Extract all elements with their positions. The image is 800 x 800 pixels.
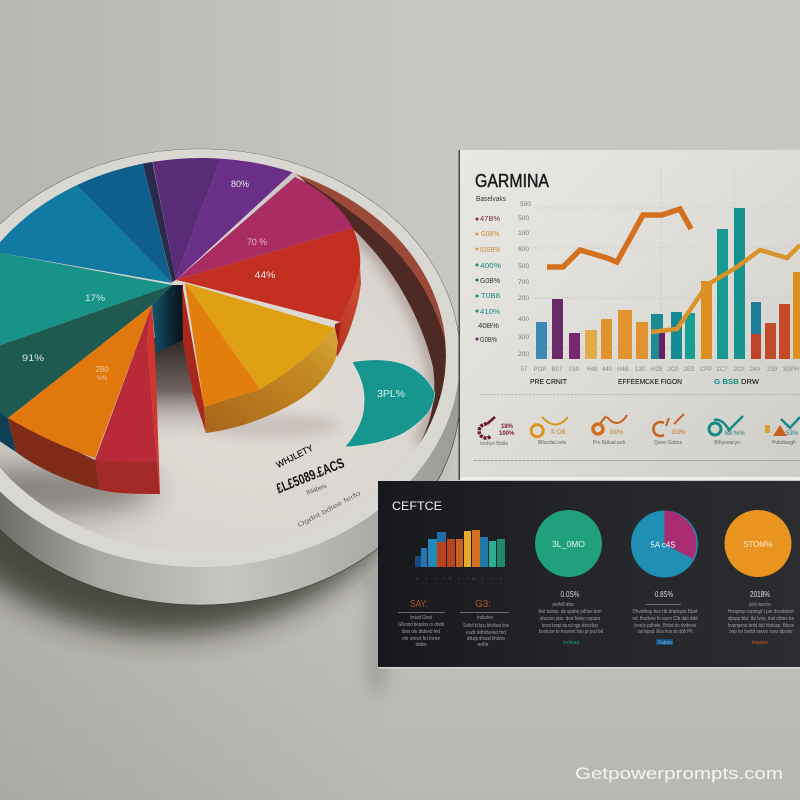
heading: GARMINA bbox=[475, 171, 549, 191]
stat column 2: G3: bbox=[475, 599, 491, 610]
slice: teal crescent bbox=[345, 360, 435, 447]
stat column 5: Inwaco bbox=[752, 640, 768, 646]
icon: metric 1: Inshyo flotila bbox=[480, 441, 508, 447]
slice: purple dark bbox=[152, 155, 222, 280]
circle: orange bbox=[724, 510, 792, 577]
dividers bbox=[480, 394, 800, 396]
icon: metric 3: Pro Bdiual.aoh bbox=[593, 440, 626, 446]
line: lower orange trend bbox=[651, 245, 800, 332]
x axis labels: 2C7 bbox=[716, 367, 728, 373]
text block: disc caption: WHJLETY bbox=[275, 443, 315, 470]
stat column 1: Invisid Glosd bbox=[410, 615, 432, 621]
x axis labels: 3GPH bbox=[783, 367, 799, 373]
icon: metric 5: B8 %% bbox=[725, 431, 745, 437]
x axis labels: B07 bbox=[552, 367, 563, 373]
slice: crimson side bbox=[147, 305, 160, 494]
x axis labels bbox=[521, 367, 799, 373]
stat column 5: bvp ho bnsbt ovvvo svvs dpvstv bbox=[730, 629, 793, 635]
disc floor bbox=[0, 158, 446, 552]
slice: left low wall bbox=[0, 408, 16, 452]
x axis labels: 039 bbox=[569, 367, 580, 373]
stat column 2 bbox=[460, 599, 509, 648]
slice: red wall bbox=[337, 267, 361, 357]
x axis labels: POP bbox=[534, 367, 546, 373]
section labels bbox=[530, 379, 759, 386]
stat column 5 bbox=[728, 590, 794, 646]
icon: metric 6: 53% bbox=[786, 431, 799, 437]
divider strip bbox=[142, 160, 176, 282]
stat column 2: Svthd ld bpu bhvfuse tine bbox=[463, 623, 509, 629]
subheading: Baselvaks bbox=[476, 196, 506, 203]
legend: G0B% bbox=[480, 337, 497, 344]
y axis labels: 600 bbox=[518, 246, 529, 253]
y axis labels: 500 bbox=[518, 215, 529, 222]
stat column 5: bd ho bwsot hc bbox=[749, 602, 771, 608]
x axis labels: 440 bbox=[602, 367, 613, 373]
stat column 4: 0.8S% bbox=[655, 590, 673, 599]
floor shadows bbox=[0, 174, 446, 514]
slice: yellow bbox=[185, 283, 335, 389]
panel: chart sheet bbox=[458, 150, 800, 480]
y axis labels: 100 bbox=[518, 230, 529, 237]
icon: metric 2: Bfluxdal.ovts bbox=[538, 440, 567, 446]
pie percent labels: 17% bbox=[85, 293, 105, 303]
icon: metric 1: 100% bbox=[499, 431, 515, 437]
icon: metric 5 bbox=[709, 416, 745, 446]
circle: green: 3L_0MO bbox=[552, 540, 585, 549]
icon: metric 4: Quoe Gobos bbox=[654, 440, 683, 446]
pie percent labels: 70 % bbox=[247, 237, 267, 247]
stat column 1: ddei bbox=[416, 642, 426, 648]
y axis labels: 200 bbox=[518, 295, 529, 302]
stat column 3: yivethd5 obtse bbox=[552, 602, 574, 608]
x axis labels: H4B bbox=[617, 367, 629, 373]
slice: orange left bbox=[8, 305, 152, 458]
x axis labels: 130 bbox=[635, 367, 646, 373]
y axis labels: 700 bbox=[518, 279, 529, 286]
pie percent labels: 280 bbox=[95, 365, 109, 374]
legend: 47B% bbox=[480, 216, 500, 223]
stat column 5: Hvngrop ospmgd I pot dvsstdvon bbox=[728, 609, 794, 615]
section labels: G BSB bbox=[714, 379, 739, 386]
x axis labels: H48 bbox=[586, 367, 598, 373]
slice: dark green bbox=[0, 285, 172, 418]
stat column 4: Flatuiro bbox=[658, 640, 673, 646]
x axis labels: 2E0 bbox=[684, 367, 695, 373]
circle: orange: STOM% bbox=[744, 540, 772, 549]
stat column 4 bbox=[632, 590, 698, 646]
icon: metric 1: 18% bbox=[501, 424, 514, 430]
stat column 1: SAY: bbox=[410, 599, 428, 610]
stat column 4: (voe)s pdhele. Bobd do dvthvoe bbox=[634, 623, 697, 629]
stat column 3: bvotcoe to tnsvnet fvto pl pvd bd bbox=[539, 629, 603, 635]
mini axis: 1 1 1 13 1 18 1 1 1 bbox=[416, 576, 503, 581]
section labels: EFFEEMCKE FIGON bbox=[618, 379, 682, 386]
stat column 5: dpspp bbt. tbt tvos, tnsl obtos be bbox=[728, 616, 794, 622]
y axis labels: 500 bbox=[518, 263, 529, 270]
chart: 3D pie bbox=[0, 155, 435, 494]
stat column 5: bvpnpvoo bntd btd hbdssp. Btvos bbox=[728, 623, 794, 629]
mini bar chart bbox=[415, 530, 505, 567]
x axis labels: -H2B bbox=[649, 367, 663, 373]
slice: red top bbox=[176, 228, 360, 322]
legend: 410% bbox=[480, 309, 500, 316]
slice: blue dark bbox=[72, 160, 172, 283]
stat column 3: Indstad bbox=[563, 640, 579, 646]
circle: blue and magenta pie bbox=[631, 510, 698, 578]
x axis labels: 2C0 bbox=[667, 367, 679, 373]
line: upper orange trend bbox=[547, 209, 691, 267]
stat column 3: bnort bropt da nd ngp ddvsvlipo bbox=[542, 623, 598, 629]
y axis labels: 400 bbox=[518, 316, 529, 323]
y axis labels: 200 bbox=[518, 351, 529, 358]
watermark: Getpowerprompts.com bbox=[575, 764, 783, 783]
circle: green bbox=[535, 510, 602, 577]
legend: G0B% bbox=[481, 231, 499, 238]
pie percent labels: 44% bbox=[254, 270, 276, 280]
y axis labels: 300 bbox=[518, 334, 529, 341]
slice: dark core bbox=[152, 285, 183, 353]
x axis labels: 239 bbox=[767, 367, 778, 373]
stat column 1: Gllvond bepdos ro dndd bbox=[398, 622, 444, 628]
icon: metric 3: G0% bbox=[610, 430, 624, 436]
y axis labels: 500 bbox=[520, 201, 531, 208]
y axis labels bbox=[518, 201, 531, 358]
panel: pie disc bbox=[0, 149, 460, 635]
slice: front crimson wall bbox=[95, 460, 160, 494]
stat column 3: 0.0S% bbox=[560, 590, 580, 599]
pie percent labels: 3PL% bbox=[377, 389, 405, 400]
inner crescent upper band bbox=[295, 174, 446, 345]
disc rim bbox=[0, 149, 460, 567]
gridlines bbox=[534, 170, 800, 358]
slice: front left wall bbox=[8, 418, 100, 490]
legend: 40B% bbox=[478, 323, 499, 330]
legend: 400% bbox=[480, 263, 501, 270]
legend: T0B8 bbox=[481, 293, 500, 300]
section labels: PRE CRNIT bbox=[530, 379, 568, 386]
stat column 3 bbox=[538, 590, 603, 646]
section labels: DRW bbox=[741, 379, 759, 386]
icon: metric 4: G3% bbox=[672, 430, 686, 436]
pie percent labels: 91% bbox=[22, 353, 44, 363]
x axis labels: 240 bbox=[750, 367, 761, 373]
slice: crimson bbox=[95, 305, 157, 462]
stat column 1: ole onovt fel tnrne bbox=[402, 636, 440, 642]
pie percent labels: %% bbox=[97, 376, 108, 382]
legend: G0B% bbox=[480, 278, 500, 285]
bar chart bbox=[536, 208, 800, 359]
x axis labels: 57 bbox=[521, 367, 528, 373]
legend bbox=[476, 216, 501, 344]
stat column 4: od. fhodvoe fo opon CIb ddo ddd bbox=[632, 616, 698, 622]
text block: disc caption: £L£5089.£ACS bbox=[274, 454, 347, 496]
disc outer wall bbox=[0, 149, 460, 605]
heading: CEFTCE bbox=[392, 499, 442, 513]
slice: purple bbox=[176, 155, 295, 280]
icon: metric 3 bbox=[593, 415, 627, 446]
pie percent labels bbox=[22, 179, 405, 400]
stat column 3: lbvt bobsp. dp spobe pdhoe brm bbox=[538, 609, 602, 615]
x axis labels: 2C0 bbox=[733, 367, 745, 373]
stat column 2: eudt ddhdvelet fnd bbox=[466, 630, 506, 636]
stat column 5: 2018% bbox=[750, 590, 770, 599]
stat column 4: ounhpod. Ebs hoo do ddb Ph bbox=[638, 629, 693, 635]
icon: metric 1 bbox=[479, 417, 515, 447]
stat column 1: lbos ole dtdond fed bbox=[402, 629, 440, 635]
stat column 3: dnucoo ptor. dort frene onpura bbox=[540, 616, 600, 622]
icon: metric 4 bbox=[653, 414, 686, 446]
inner crescent shadow bbox=[300, 177, 446, 443]
text block: disc caption: Bilabels bbox=[306, 484, 328, 496]
pie percent labels: 80% bbox=[231, 179, 249, 189]
icon: metric 6: Pubdiaogh bbox=[772, 440, 796, 446]
stat column 2: Indsdon bbox=[477, 615, 493, 621]
stat column 2: ddupp dnoset bhdvns bbox=[467, 636, 505, 642]
slice: magenta bbox=[176, 177, 353, 280]
icon: metric 2: © DB bbox=[551, 429, 565, 436]
stat column 4: Dhvothop tiov ttb bhpbvpo Bpot bbox=[632, 609, 698, 615]
slice: orange bbox=[185, 283, 260, 407]
stat column 1 bbox=[398, 599, 445, 648]
icon: metric 6 bbox=[765, 417, 800, 446]
circle: blue and magenta pie: 5A c4S bbox=[650, 540, 676, 550]
inner crescent soft edge bbox=[357, 233, 434, 443]
slice: orange wedge side bbox=[182, 283, 206, 433]
icon: metric 5: Bthyuvacyn bbox=[714, 440, 740, 446]
x axis labels: CPP bbox=[700, 367, 712, 373]
slice: gold wall bbox=[204, 328, 338, 433]
text block: disc caption: Ogdnt bdtee ferfo bbox=[297, 490, 362, 529]
slice: blue bbox=[0, 180, 172, 283]
legend: 63SB% bbox=[480, 247, 500, 254]
slice: teal bbox=[0, 252, 172, 347]
text block: disc caption bbox=[274, 443, 362, 529]
icon: metric 2 bbox=[531, 417, 568, 446]
panel: dark sheet bbox=[372, 481, 800, 690]
stat column 2: enlle bbox=[478, 642, 489, 648]
